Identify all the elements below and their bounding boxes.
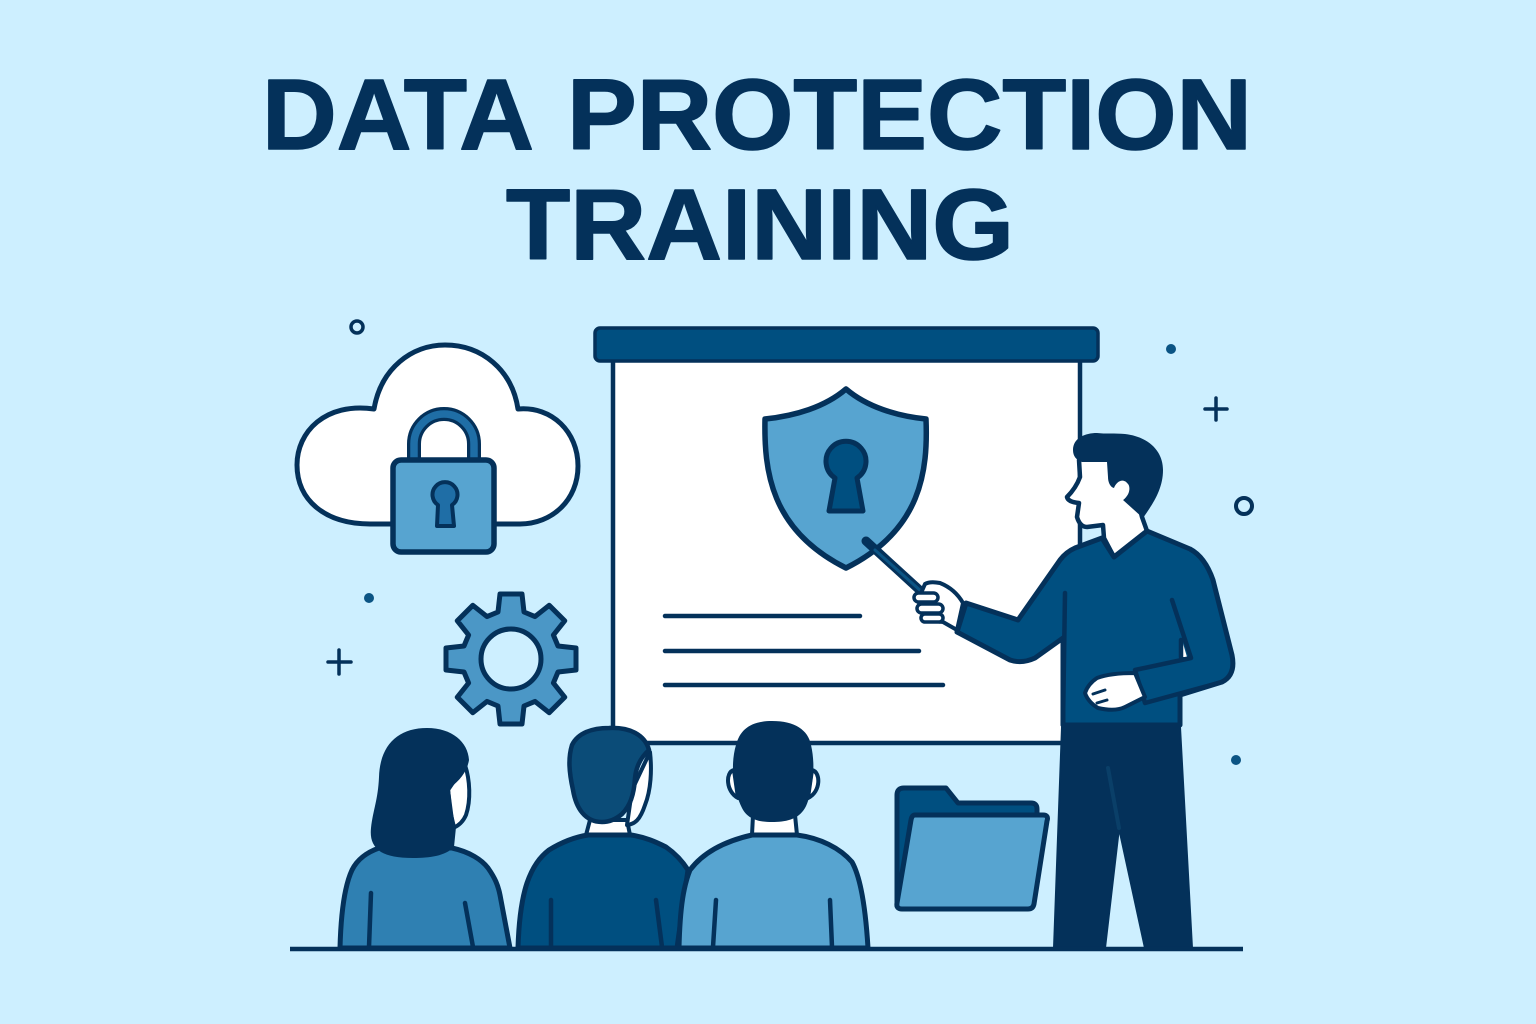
- sleeve gap: [1182, 640, 1187, 657]
- person one: woman: [340, 728, 510, 948]
- person two: man in navy: [518, 728, 688, 948]
- hair: [1073, 433, 1163, 518]
- folder front: [897, 815, 1048, 909]
- floor line: [290, 947, 1243, 951]
- trouser fold: [1108, 768, 1119, 828]
- padlock body: [393, 460, 494, 552]
- padlock shackle: [414, 414, 474, 462]
- screen top bar: [595, 328, 1098, 361]
- title: [262, 59, 1252, 281]
- folder icon: [897, 788, 1048, 909]
- sweater fold lines: [1063, 593, 1222, 725]
- presentation screen: [595, 328, 1098, 743]
- title: DATA: [262, 59, 534, 171]
- screen panel: [613, 355, 1080, 743]
- cloud: [297, 345, 578, 524]
- sweater: [957, 531, 1233, 725]
- ear: [1116, 481, 1129, 500]
- padlock keyhole: [432, 482, 457, 526]
- title: PROTECTION: [567, 59, 1252, 171]
- resting hand: [1085, 673, 1145, 710]
- icon: gear: [446, 594, 576, 724]
- icon: shield with keyhole: [765, 389, 926, 568]
- folder back: [897, 788, 1037, 906]
- screen text lines: [665, 616, 943, 685]
- legs: [1054, 727, 1192, 948]
- person three: man in light blue: [679, 721, 868, 948]
- decorative sparkles: [328, 321, 1252, 765]
- neck and face: [1067, 450, 1147, 557]
- presenter: [866, 433, 1233, 948]
- title: TRAINING: [506, 169, 1014, 281]
- pointing hand: [914, 582, 963, 630]
- pointer stick: [866, 541, 925, 595]
- audience: [340, 721, 868, 948]
- icon: cloud with padlock: [297, 345, 578, 552]
